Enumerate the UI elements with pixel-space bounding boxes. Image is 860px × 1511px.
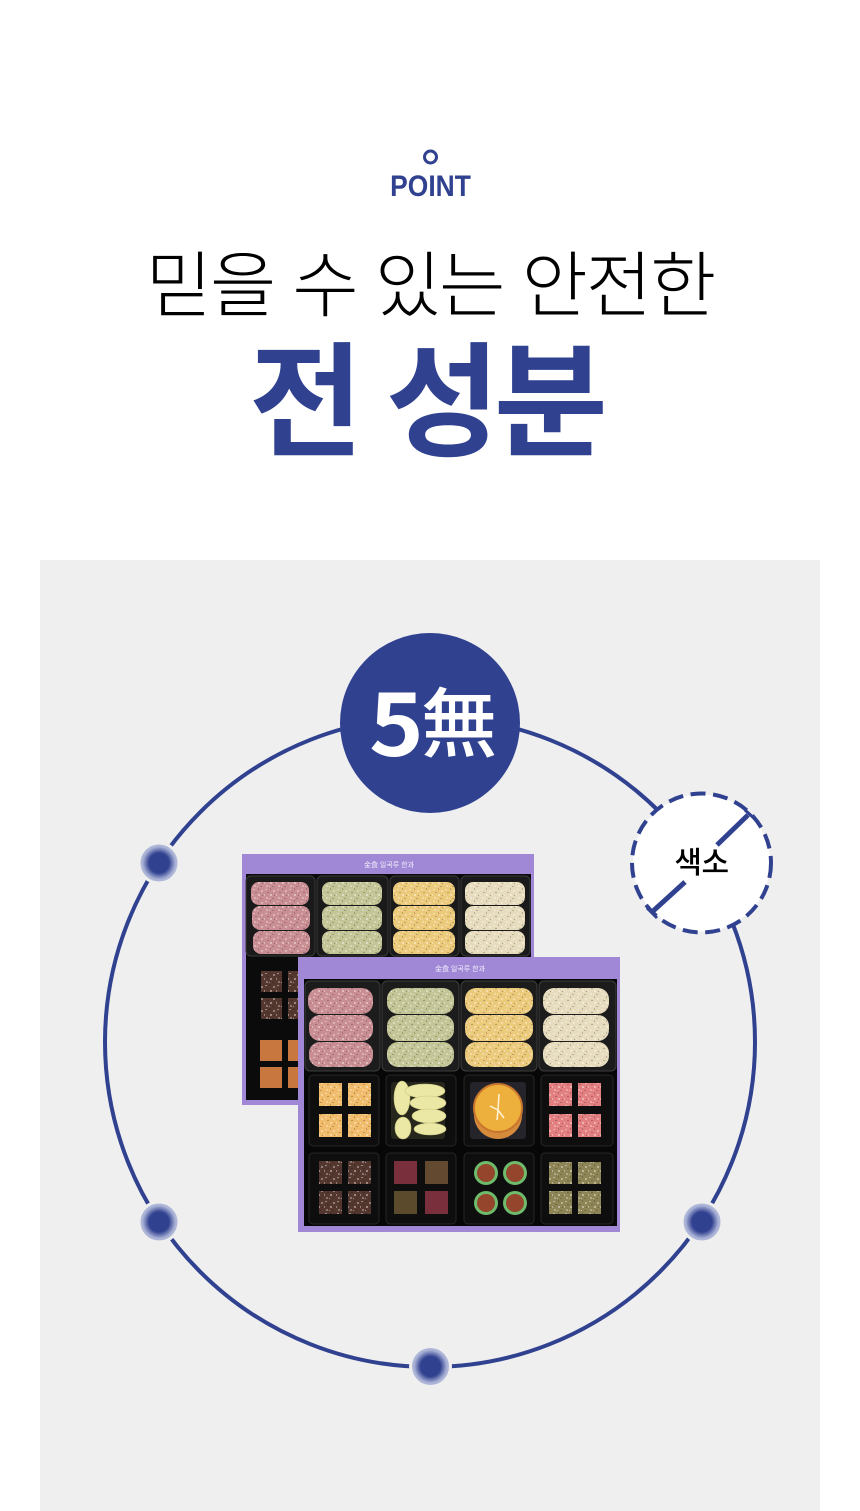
product: back gift box <box>242 854 534 1105</box>
box logo: 金食 일곡루 한과 <box>364 860 415 869</box>
berry squares <box>549 1083 601 1137</box>
citron slices <box>391 1081 446 1139</box>
chocolate squares <box>394 1161 448 1214</box>
node dot: bottom <box>410 1346 450 1386</box>
node dot: upper left <box>139 843 179 883</box>
panel: grey background <box>40 560 820 1511</box>
badge: no colorant <box>632 794 771 932</box>
large ring <box>105 717 755 1367</box>
label: POINT: POINT <box>390 168 471 202</box>
dried orange slices <box>470 1082 526 1139</box>
badge: no colorant: 색소 <box>674 838 729 882</box>
puffed grain squares <box>319 1083 371 1137</box>
olive grain squares <box>549 1162 601 1214</box>
ring diagram <box>105 633 771 1386</box>
dark squares <box>261 971 309 1019</box>
caramel squares <box>260 1040 309 1088</box>
heading: subtitle: 믿을 수 있는 안전한 <box>146 227 714 332</box>
box logo: 金食 일곡루 한과 <box>435 964 486 973</box>
badge: 5 mu <box>340 633 520 813</box>
dark grain squares <box>319 1161 371 1214</box>
tray cells <box>309 1075 613 1224</box>
rice roll tray row <box>246 876 530 956</box>
node dot: lower right <box>682 1202 722 1242</box>
heading: main title: 전 성분 <box>249 302 603 482</box>
product: front gift box <box>298 957 620 1232</box>
walnut cups <box>474 1161 527 1215</box>
node dot: lower left <box>139 1202 179 1242</box>
icon: point ring <box>424 151 436 163</box>
badge: 5 mu: 無 <box>421 663 497 773</box>
rice roll tray row <box>305 981 616 1071</box>
badge: 5 mu: 5 <box>369 656 424 781</box>
